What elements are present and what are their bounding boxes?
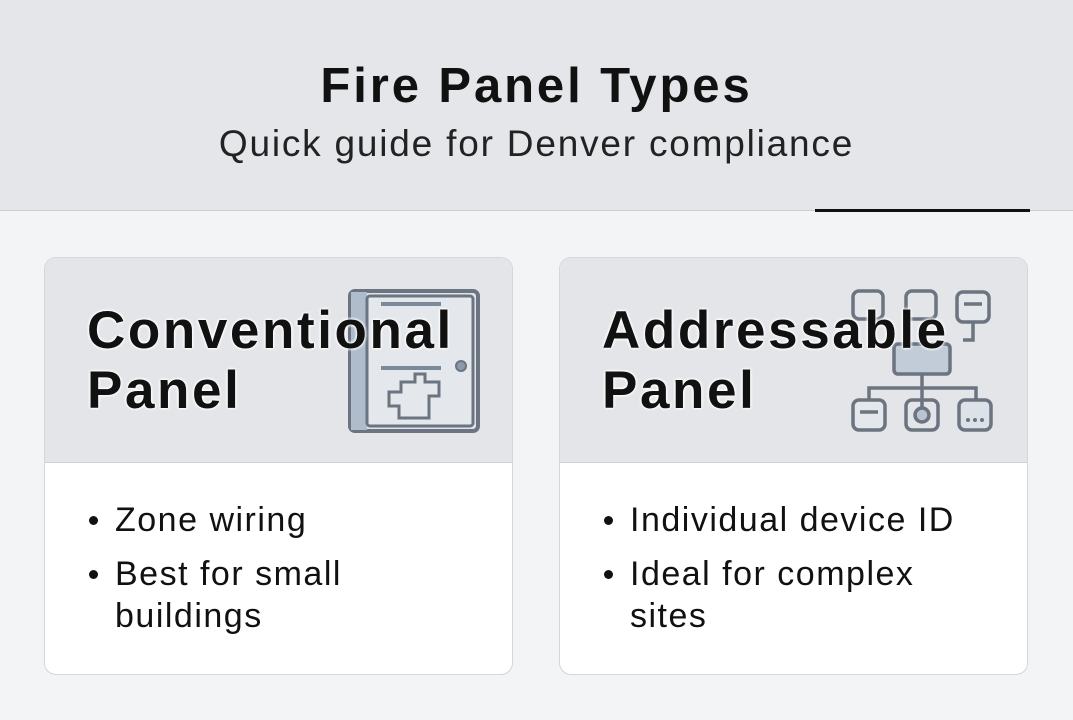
icon: conventional panel [348, 289, 480, 433]
card title: Conventional [87, 301, 454, 360]
card title [602, 301, 949, 420]
bullet list: Zone wiring [115, 501, 307, 539]
bullet list [89, 501, 342, 635]
panel: conventional [44, 257, 513, 675]
subtitle: Quick guide for Denver compliance [219, 123, 854, 164]
accent line [815, 209, 1030, 212]
card title: Panel [602, 361, 756, 420]
header band [0, 0, 1073, 211]
icon: network [851, 289, 993, 432]
bullet list [604, 501, 955, 635]
bullet list: Individual device ID [630, 501, 955, 539]
bullet list: Best for small [115, 555, 342, 593]
bullet list: buildings [115, 597, 263, 635]
title: Fire Panel Types [320, 59, 753, 113]
card title: Panel [87, 361, 241, 420]
bullet list: sites [630, 597, 707, 635]
bullet list: Ideal for complex [630, 555, 914, 593]
card title [87, 301, 454, 420]
panel: addressable [559, 257, 1028, 675]
card title: Addressable [602, 301, 949, 360]
